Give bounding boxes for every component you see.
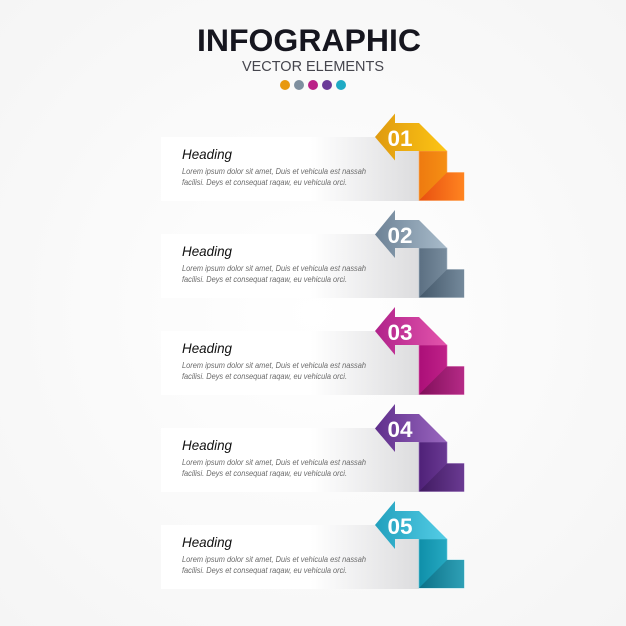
arrow icon 02 xyxy=(375,210,464,298)
body text 01: Lorem ipsum dolor sit amet, Duis et vehicula est nassah xyxy=(182,167,367,176)
body text 05: facilisi. Deys et consequat raqaw, eu vehicula orci. xyxy=(182,566,347,575)
arrow icon 04 xyxy=(375,404,464,492)
panel: step 01 xyxy=(161,114,464,201)
body text 02 xyxy=(182,264,367,284)
body text 04: Lorem ipsum dolor sit amet, Duis et vehicula est nassah xyxy=(182,458,367,467)
heading 02: Heading xyxy=(182,243,232,259)
arrow icon 05 xyxy=(375,501,464,588)
text panel 02 xyxy=(161,234,419,298)
panel: step 05 xyxy=(161,501,464,589)
arrow icon 05: 05 xyxy=(387,514,413,539)
body text 05: Lorem ipsum dolor sit amet, Duis et vehicula est nassah xyxy=(182,555,367,564)
text panel 05 xyxy=(161,525,419,589)
body text 04 xyxy=(182,458,367,478)
text panel 01 xyxy=(161,137,419,201)
body text 01: facilisi. Deys et consequat raqaw, eu vehicula orci. xyxy=(182,178,347,187)
arrow icon 03 xyxy=(375,307,464,394)
title: INFOGRAPHIC xyxy=(197,22,421,58)
body text 01 xyxy=(182,167,367,187)
body text 03: facilisi. Deys et consequat raqaw, eu vehicula orci. xyxy=(182,372,347,381)
arrow icon 02: 02 xyxy=(387,223,413,248)
heading 03: Heading xyxy=(182,340,232,356)
body text 02: Lorem ipsum dolor sit amet, Duis et vehicula est nassah xyxy=(182,264,367,273)
arrow icon 03: 03 xyxy=(387,320,413,345)
panel: step 02 xyxy=(161,210,464,298)
arrow icon 01: 01 xyxy=(387,126,413,151)
colour dots xyxy=(280,80,346,90)
subtitle: VECTOR ELEMENTS xyxy=(242,59,384,75)
body text 03: Lorem ipsum dolor sit amet, Duis et vehicula est nassah xyxy=(182,361,367,370)
text panel 03 xyxy=(161,331,419,395)
body text 03 xyxy=(182,361,367,381)
arrow icon 01 xyxy=(375,114,464,200)
heading 05: Heading xyxy=(182,534,232,550)
body text 02: facilisi. Deys et consequat raqaw, eu vehicula orci. xyxy=(182,275,347,284)
arrow icon 04: 04 xyxy=(387,417,413,442)
text panel 04 xyxy=(161,428,419,492)
body text 05 xyxy=(182,555,367,575)
panel: step 04 xyxy=(161,404,464,492)
heading 01: Heading xyxy=(182,146,232,162)
heading 04: Heading xyxy=(182,437,232,453)
body text 04: facilisi. Deys et consequat raqaw, eu vehicula orci. xyxy=(182,469,347,478)
panel: step 03 xyxy=(161,307,464,395)
